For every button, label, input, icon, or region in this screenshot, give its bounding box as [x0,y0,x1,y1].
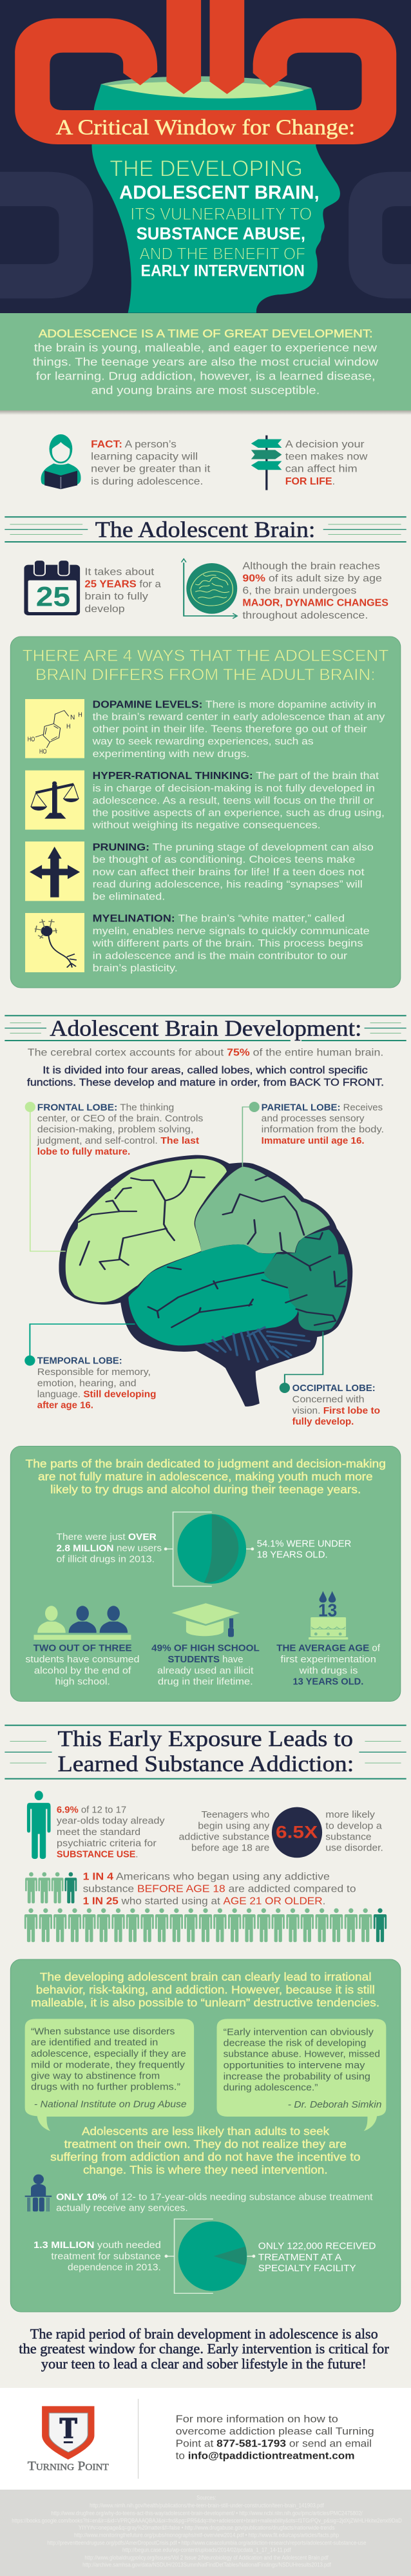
heading: This Early Exposure [5,1725,406,1780]
text: less likely to seek treatment: treatment on their own. They do not realize they are [64,2138,347,2151]
text: 90 percent: throughout adolescence. [242,610,368,621]
text: only 122,000: TREATMENT AT A [258,2252,342,2263]
text: 25 years [84,566,161,615]
callout: temporal lobe: TEMPORAL LOBE: [37,1355,122,1366]
brain folds [79,1171,346,1327]
quote bubble: Dr. Simkin: - Dr. Deborah Simkin [288,2099,381,2110]
head silhouette [91,84,340,313]
text: hyper-rational thinking: HYPER-RATIONAL THINKING: The part of the brain that [93,770,379,782]
quote bubble: Dr. Simkin: increase the probability of using [224,2071,370,2082]
icon: three students [33,1606,131,1640]
text: 49 percent [151,1642,260,1687]
chain with arrows [15,0,396,144]
addiction statistics [24,1791,387,1942]
text: 6.9 percent: 6.9% of 12 to 17 [57,1804,126,1815]
subtitle: AND THE BENEFIT OF [139,245,305,264]
text: dopamine levels: experimenting with new drugs. [93,748,249,760]
facts row [41,434,368,490]
text: 49 percent: STUDENTS have [167,1654,244,1665]
text: average age [276,1642,380,1687]
text: new users [56,1532,162,1564]
text: hyper-rational thinking: the positive aspects of an experience, such as drug using, [93,807,385,818]
text: 6.9 percent: year-olds today already [57,1815,165,1826]
fact text: decision: teen makes now [285,450,368,462]
subtitle: ADOLESCENT BRAIN, [119,181,320,203]
temporal lobe [128,1244,298,1345]
quote bubble: Dr. Simkin: opportunities to intervene may [224,2060,365,2071]
text: hyper-rational thinking: adolescence. As a result, teens will focus on the thrill or [93,794,374,806]
callout: occipital lobe [280,1332,380,1427]
text: pruning: read during adolescence, his reading “synapses” will [93,878,363,890]
cortex intro text: It is divided into four areas, called lobes, which control specific [43,1064,368,1076]
callout: occipital lobe: vision. First lobe to [292,1405,380,1416]
text: average age: first experimentation [280,1654,376,1665]
icon: person at desk [25,2175,52,2211]
text: dopamine levels: other point in their life. Teens therefore go out of their [93,723,367,735]
text: pruning [93,841,374,902]
intro paragraph: the brain is young, malleable, and eager to experience new [34,341,378,354]
text: 90 percent [242,560,388,621]
callout: temporal lobe [24,1324,157,1410]
callout: parietal lobe: and processes sensory [262,1113,365,1124]
text: hyper-rational thinking: without weighing its negative consequences. [92,819,321,831]
text: myelination: in adolescence and is the main contributor to our [93,950,347,961]
icon row: 1 in 25 [24,1908,387,1942]
text: average age: 13 YEARS OLD. [293,1676,363,1687]
pie chart: 54.1 percent under 18 [164,1512,254,1586]
text: two out of three [25,1642,139,1687]
text: under 18: 54.1% WERE UNDER [257,1538,351,1549]
icon: dopamine molecule [25,699,84,758]
icon: dopamine molecule: HO [39,748,47,755]
text: pruning: PRUNING: The pruning stage of development can also [93,841,374,853]
icon: dopamine molecule: H [78,712,82,718]
text: teenagers who [179,1809,270,1853]
quote bubble: NIDA: are identified and treated in [31,2037,158,2048]
callout: temporal lobe: emotion, hearing, and [37,1378,137,1389]
text: hyper-rational thinking [92,770,385,831]
text: dopamine levels [92,698,385,760]
text: 25 years: brain to fully [84,590,148,602]
callout: parietal lobe: Immature until age 16. [262,1135,365,1146]
text: 1.3 million: dependence in 2013. [68,2262,161,2273]
icon: brain growth arrows [182,559,237,619]
text: 1 in 4: substance BEFORE AGE 18 are addicted compared to [83,1883,356,1894]
text: 6.9 percent [57,1804,165,1860]
contact text: to info@tpaddictiontreatment.com [176,2450,355,2461]
panel heading: The developing adolescent brain can clearly lead to irrational [40,1971,372,1983]
fact text: learning capacity: never be greater than it [91,463,210,474]
text: under 18: 18 YEARS OLD. [257,1549,328,1560]
occipital lobe [263,1229,348,1331]
panel heading [25,1457,386,1496]
callout: occipital lobe: fully develop. [292,1416,354,1427]
text: 6.9 percent: psychiatric criteria for [57,1838,157,1849]
text: more likely: more likely [325,1809,375,1820]
heading: The Adolescent Brain: The Adolescent Brain: [95,518,316,542]
text: only 122,000: ONLY 122,000 RECEIVED [258,2240,376,2251]
heading: Adolescent Brain Development: Adolescent Brain Development: [50,1017,362,1041]
text: myelination: brain’s plasticity. [93,962,178,974]
text: only 10 percent: actually receive any services. [56,2202,188,2213]
text: teenagers who: before age 18 are [191,1842,269,1853]
logo: Turning Point shield [28,2406,109,2473]
text: myelination [92,912,370,974]
panel: four ways [10,637,401,988]
quote bubble: Dr. Simkin: substance abuse. However, missed [224,2048,380,2059]
icon: birthday cake [309,1591,348,1640]
quote bubble: Dr. Simkin [217,2019,386,2131]
text: new users: of illicit drugs in 2013. [56,1553,155,1564]
callout: temporal lobe: after age 16. [37,1399,93,1410]
text: myelination: with different parts of the brain. This process begins [92,937,363,949]
intro paragraph: and young brains are most susceptible. [91,384,320,397]
heading: This Early Exposure: This Early Exposure Leads to [58,1727,353,1751]
text: 25 years: It takes about [84,566,154,577]
logo: Turning Point shield: Turning Point [28,2458,109,2473]
text: 49 percent: drug in their lifetime. [158,1676,253,1687]
intro paragraph [33,341,379,397]
icon: neuron [25,913,84,972]
hero banner [0,0,411,313]
callout: occipital lobe: Concerned with [292,1394,365,1405]
text: two out of three: alcohol by the end of [34,1665,131,1676]
icon: calendar 25 [24,560,80,615]
icon: graduation cap [172,1603,240,1637]
text: new users: There were just OVER [56,1532,157,1543]
footer: sources [0,2490,411,2576]
icon row: 1 in 4 [25,1872,77,1903]
text: 25 years: develop [84,603,125,615]
quote bubble: Dr. Simkin: during adolescence.” [224,2082,318,2093]
footer: contact band [0,2388,411,2490]
intro heading: ADOLESCENCE IS A TIME OF GREAT DEVELOPMENT: [39,327,373,340]
icon: signpost [251,436,282,490]
text: average age: with drugs is [299,1665,358,1676]
icon: dopamine molecule: HO [28,736,35,743]
panel: youth statistics [10,1446,401,1701]
text: only 122,000: SPECIALTY FACILITY [258,2263,356,2274]
text: 49 percent: 49% OF HIGH SCHOOL [151,1642,260,1653]
fact text: decision: A decision your [285,438,365,450]
text: two out of three: high school. [55,1676,110,1687]
callout: frontal lobe [25,1102,203,1251]
callout: parietal lobe [242,1102,384,1167]
callout: occipital lobe: OCCIPITAL LOBE: [292,1383,376,1394]
text: under 18 [257,1538,351,1560]
stat circle: 6.5X [272,1807,322,1858]
fact text: decision: FOR LIFE. [285,476,335,487]
text: 1 in 4 [83,1870,356,1907]
icon: dopamine molecule: N [70,715,75,721]
footer: sources: http://begun.case.edu/wp-content/uploads/2014/02/pcdata_1_17_14-11.pdf [122,2547,291,2553]
text: myelination: myelin, enables nerve signals to quickly communicate [93,925,370,937]
quote bubble: NIDA: mild or moderate, they frequently [31,2059,185,2070]
text: 90 percent: 90% of its adult size by age [242,572,382,584]
subtitle: ITS VULNERABILITY TO [130,205,312,224]
cortex intro text [27,1046,384,1088]
callout: frontal lobe: FRONTAL LOBE: The thinking [37,1102,174,1113]
text: less likely to seek treatment [50,2125,360,2177]
heading: This Early Exposure: Learned Substance Addiction: [58,1752,354,1776]
icon: crossroads arrows [25,841,84,901]
text: more likely: use disorder. [325,1842,383,1853]
text: 1 in 4: 1 IN 25 who started using at AGE 21 OR OLDER. [83,1895,325,1907]
icon: birthday cake: 13 [318,1600,337,1620]
text: pruning: now can affect their brains for life! If a teen does not [93,866,365,878]
text: two out of three: TWO OUT OF THREE [33,1642,132,1653]
text: teenagers who: Teenagers who [201,1809,269,1820]
callout: frontal lobe: lobe to fully mature. [37,1146,130,1157]
footer: sources: Sources: [196,2495,216,2501]
text: 90 percent: Although the brain reaches [242,560,380,572]
text: only 10 percent: ONLY 10% of 12- to 17-year-olds needing substance abuse treatment [56,2191,373,2202]
fact text: learning capacity: FACT: A person’s [91,438,177,450]
callout: temporal lobe: language. Still developing [37,1389,157,1399]
text: myelination: MYELINATION: The brain’s “white matter,” called [93,912,345,924]
text: 1 in 4: 1 IN 4 Americans who began using any addictive [83,1870,330,1882]
quote bubble: NIDA: “When substance use disorders [31,2026,175,2037]
panel: intro band [0,313,411,415]
closing statement [19,2327,389,2372]
text: 1.3 million: treatment for substance [51,2251,161,2262]
fact text: decision: can affect him [285,463,358,474]
text: only 10 percent [56,2191,373,2213]
icon: scales [25,771,84,830]
text: 49 percent: already used an illicit [157,1665,254,1676]
open top of head [101,76,311,99]
text: more likely: substance [325,1831,372,1842]
quote bubble: Dr. Simkin: decrease the risk of developing [224,2037,366,2048]
text: teenagers who: begin using any [198,1820,270,1831]
contact text: Point at 877-581-1793 or send an email [176,2437,372,2449]
subtitle: SUBSTANCE ABUSE, [137,224,305,244]
fact text: learning capacity [91,438,210,487]
text: 90 percent: 6, the brain undergoes [242,584,357,596]
fact text: learning capacity: learning capacity will [91,450,198,462]
icon: standing person [27,1791,51,1859]
text: dopamine levels: DOPAMINE LEVELS: There is more dopamine activity in [93,698,376,710]
callout: frontal lobe: center, or CEO of the brain. Controls [37,1113,203,1124]
text: pruning: be eliminated. [93,890,165,902]
fact text: decision [285,438,368,487]
text: 25 years: 25 YEARS for a [84,578,161,590]
text: only 122,000 [258,2240,376,2274]
quote bubble: NIDA: - National Institute on Drug Abuse [34,2099,187,2110]
cortex intro text: The cerebral cortex accounts for about 75% of the entire human brain. [28,1046,383,1058]
panel heading: likely to try drugs and alcohol during their teenage years. [50,1483,361,1496]
brain outline [59,1155,352,1407]
icon: dopamine molecule: H [66,724,70,730]
brain facts row [24,559,388,621]
contact text: overcome addiction please call Turning [176,2425,374,2437]
pie chart: 122,000 treated [165,2219,255,2293]
icon: calendar 25: 25 [36,582,70,612]
text: more likely: to develop a [325,1820,383,1831]
subtitle: EARLY INTERVENTION [141,262,305,280]
subtitle [110,156,320,280]
text: teenagers who: addictive substance [179,1831,269,1842]
text: hyper-rational thinking: is in charge of decision-making is not fully developed in [93,782,375,794]
intro paragraph: for learning. Drug addiction, however, is a learned disease, [36,370,376,383]
brain diagram [59,1155,352,1407]
contact text: For more information on how to [176,2413,338,2425]
text: average age: THE AVERAGE AGE of [276,1642,380,1653]
callout: frontal lobe: judgment, and self-control. The last [37,1135,200,1146]
text: 1.3 million [33,2240,161,2273]
panel title [23,646,388,684]
text: new users: 2.8 MILLION new users [56,1543,162,1553]
text: less likely to seek treatment: change. This is where they need intervention. [83,2164,328,2177]
icon: student reading [41,434,81,489]
frontal lobe [66,1158,227,1302]
callout: frontal lobe: decision-making, problem solving, [37,1124,193,1135]
subtitle: THE DEVELOPING [110,156,303,181]
parietal lobe [195,1167,330,1253]
text: less likely to seek treatment: suffering from addiction and do not have the incentive to [50,2151,360,2164]
quote bubble: NIDA: adolescence, especially if they are [31,2048,186,2059]
quote bubble: NIDA [25,2019,194,2131]
panel: intervention [10,1959,401,2312]
quote bubble: NIDA: give way to abstinence from [31,2070,160,2081]
contact text [176,2413,374,2461]
text: 1.3 million: 1.3 MILLION youth needed [33,2240,161,2251]
text: dopamine levels: the brain’s reward center in early adolescence than at any [93,711,385,722]
callout: parietal lobe: PARIETAL LOBE: Receives [262,1102,383,1113]
stat circle: 6.5X: 6.5X [276,1823,318,1842]
text: 6.9 percent: meet the standard [57,1827,140,1838]
intro paragraph: things. The teenage years are also the most crucial window [33,356,379,369]
faint background chain links [0,172,411,298]
cortex intro text: functions. These develop and mature in order, from BACK TO FRONT. [27,1077,384,1088]
quote bubble: Dr. Simkin: “Early intervention can obviously [224,2026,374,2037]
text: pruning: be thought of as conditioning. Choices teens make [93,854,355,865]
fact text: learning capacity: is during adolescence. [91,476,203,487]
text: dopamine levels: way to seek rewarding experiences, such as [92,735,314,747]
title: A Critical Window for Change: A Critical Window for Change: [56,116,355,139]
cerebellum [206,1327,309,1361]
text: two out of three: students have consumed [25,1654,139,1665]
text: 6.9 percent: SUBSTANCE USE. [57,1849,138,1860]
quote bubble: NIDA: drugs with no further problems.” [31,2081,180,2092]
text: less likely to seek treatment: Adolescents are less likely than adults to seek [82,2125,330,2138]
callout: temporal lobe: Responsible for memory, [37,1367,151,1378]
callout: parietal lobe: information from the body. [262,1124,384,1135]
text: more likely [325,1809,383,1853]
panel heading [31,1971,379,2009]
